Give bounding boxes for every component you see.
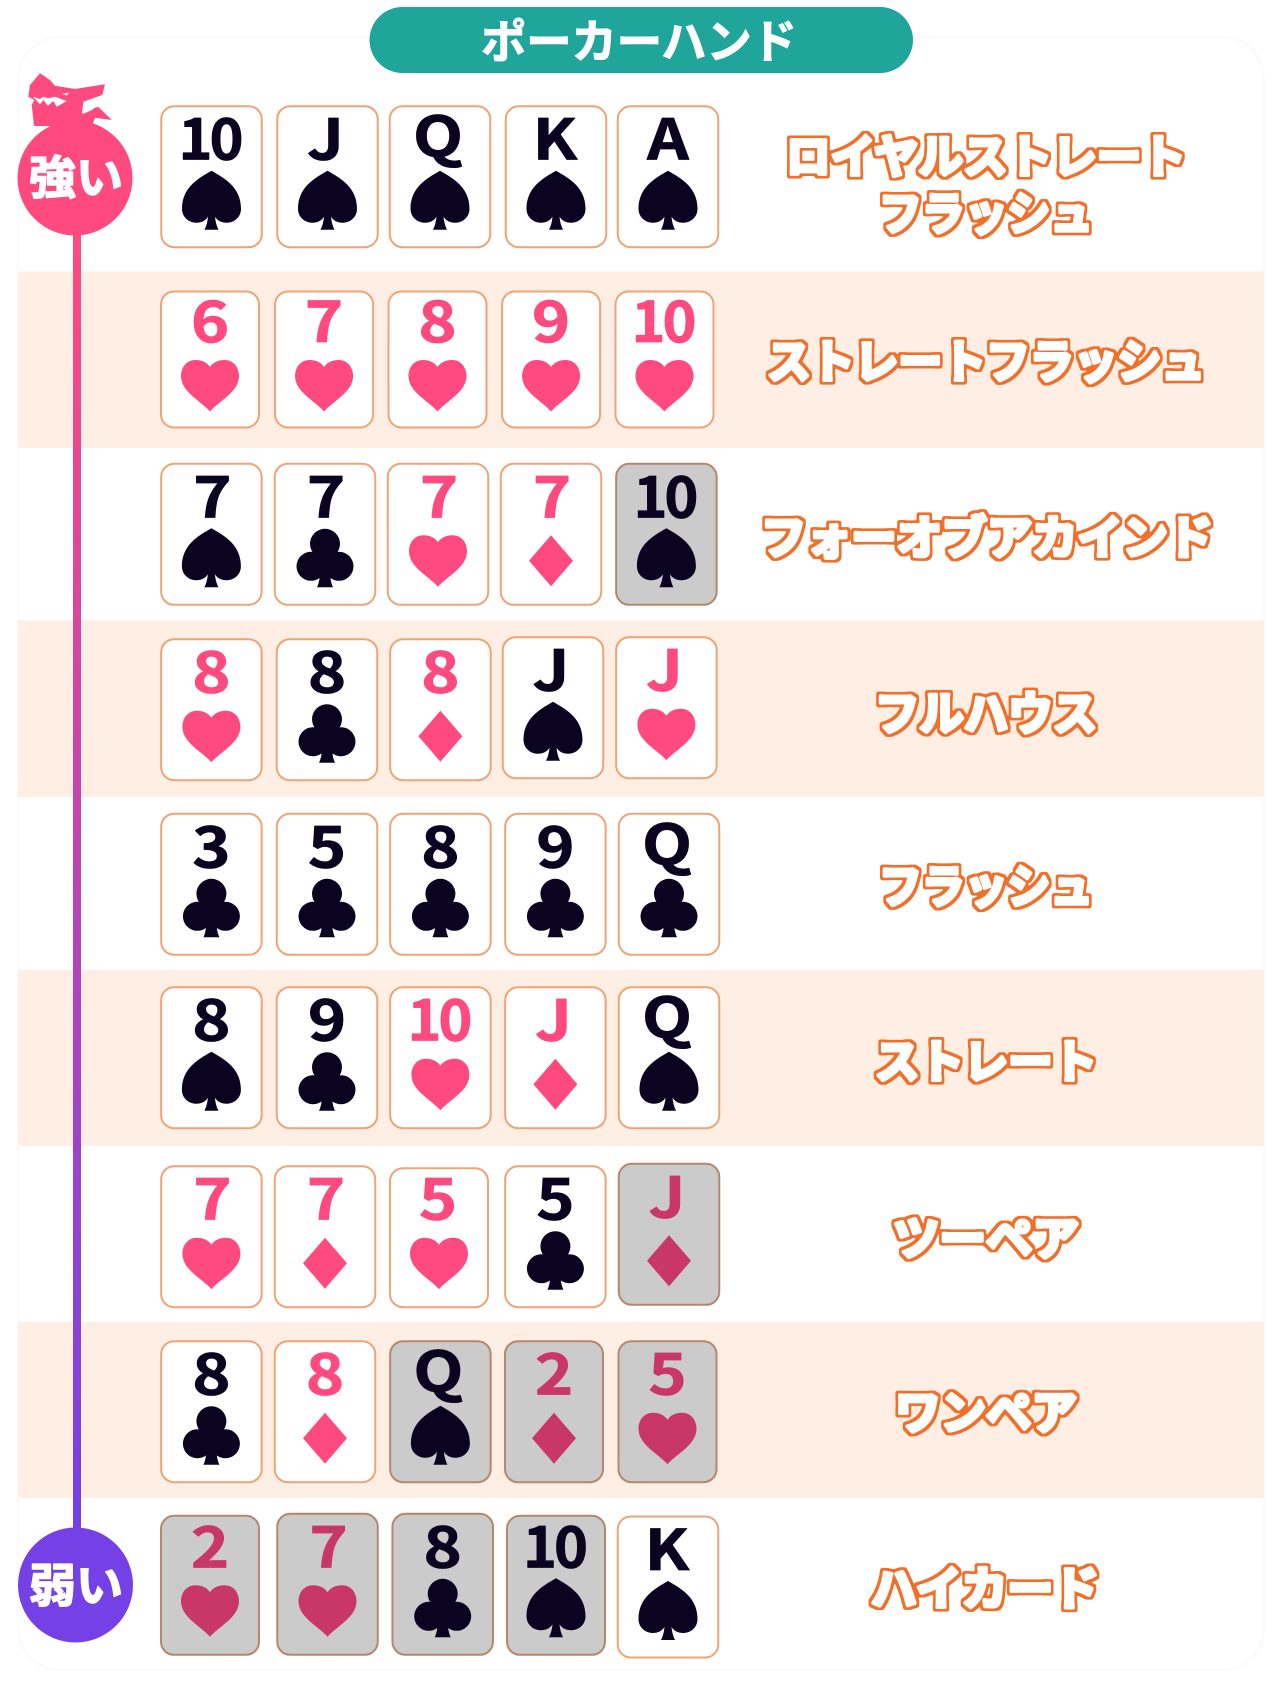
card: Q spades	[619, 974, 719, 1128]
card: 7 hearts: 7	[420, 454, 458, 534]
card: 9 clubs	[505, 804, 606, 955]
card: 7 spades	[161, 454, 262, 605]
card: 7 hearts greyed: 7	[309, 1504, 348, 1584]
card: A spades	[618, 96, 718, 247]
card: 5 clubs	[277, 804, 377, 955]
card: 5 hearts greyed	[618, 1331, 716, 1482]
card: J diamonds: J	[535, 977, 572, 1057]
card: 8 diamonds: 8	[421, 629, 460, 709]
card: 8 clubs	[161, 1331, 262, 1482]
row: one pair	[18, 1322, 1264, 1498]
title pill: ポーカーハンド	[481, 6, 797, 72]
card: 8 clubs greyed: 8	[424, 1504, 462, 1584]
card: 8 hearts	[161, 629, 262, 780]
card: 5 hearts: 5	[419, 1156, 457, 1236]
card: 7 diamonds	[275, 1156, 375, 1307]
card: 10 spades greyed	[507, 1503, 605, 1655]
card: 2 hearts greyed: 2	[191, 1504, 229, 1584]
label: four of a kind: フォーオブアカインド	[761, 502, 1213, 568]
label: one pair: ワンペア	[895, 1377, 1077, 1443]
card: 10 spades greyed: 10	[633, 453, 697, 534]
card: 7 diamonds: 7	[533, 454, 571, 534]
card: 2 diamonds greyed: 2	[535, 1331, 573, 1411]
row: straight	[18, 970, 1264, 1146]
card: 3 clubs	[161, 804, 262, 955]
card: 8 clubs: 8	[421, 804, 460, 884]
card: 7 hearts	[275, 278, 373, 428]
card: 8 clubs greyed	[392, 1504, 493, 1655]
card: Q spades greyed: Q	[413, 1328, 463, 1408]
card: 5 hearts	[390, 1156, 488, 1307]
card: 7 diamonds: 7	[307, 1156, 345, 1236]
label: straight flush: ストレートフラッシュ	[767, 326, 1205, 392]
card: 7 diamonds	[501, 454, 601, 605]
card: J hearts	[616, 627, 717, 778]
card: J hearts: J	[646, 627, 683, 707]
card: 8 hearts: 8	[192, 629, 231, 709]
card: 9 hearts	[502, 278, 600, 428]
card: 7 clubs	[275, 454, 375, 605]
card: J spades: J	[533, 627, 569, 707]
card: 8 clubs: 8	[308, 629, 346, 709]
card: 5 hearts greyed: 5	[648, 1331, 687, 1411]
title pill	[370, 6, 913, 73]
card: 8 diamonds	[390, 629, 491, 780]
row: two pair	[161, 1154, 1079, 1307]
card: 10 hearts: 10	[632, 278, 695, 359]
card: 8 diamonds: 8	[306, 1331, 344, 1411]
label: flush: フラッシュ	[879, 851, 1093, 917]
card: A spades: A	[646, 96, 690, 176]
card: 6 hearts	[161, 278, 259, 428]
card: J diamonds greyed	[619, 1154, 719, 1305]
card: K spades	[618, 1506, 718, 1658]
row: full house	[18, 620, 1264, 797]
card: 10 hearts	[616, 278, 714, 428]
strong badge	[18, 120, 132, 236]
label: royal straight flush: ロイヤルストレート	[786, 121, 1186, 187]
card: 5 clubs: 5	[308, 804, 346, 884]
card: Q spades: Q	[642, 974, 692, 1054]
label: royal straight flush: フラッシュ	[879, 178, 1093, 244]
card: J diamonds	[505, 977, 606, 1128]
card: 9 clubs	[277, 977, 377, 1128]
card: Q spades greyed	[390, 1328, 491, 1482]
card: 9 hearts: 9	[532, 278, 570, 359]
row: royal straight flush	[161, 93, 1186, 247]
card: Q spades: Q	[413, 93, 463, 173]
card: Q clubs: Q	[642, 801, 692, 881]
card: 8 clubs: 8	[192, 1331, 231, 1411]
label: full house: フルハウス	[875, 678, 1097, 744]
label: two pair: ツーペア	[893, 1203, 1079, 1269]
row: flush	[161, 801, 1093, 955]
weak badge	[18, 1528, 133, 1642]
card: 7 hearts: 7	[193, 1156, 232, 1236]
card: 8 hearts: 8	[418, 278, 457, 359]
strong badge: 強い	[29, 142, 123, 208]
card: 7 hearts	[161, 1156, 262, 1307]
icon: dragon	[28, 73, 112, 126]
card: 10 spades greyed: 10	[523, 1503, 586, 1584]
card: K spades: K	[533, 96, 578, 176]
card: 8 clubs	[277, 629, 377, 780]
card: J diamonds greyed: J	[649, 1154, 685, 1234]
card: 9 clubs: 9	[536, 804, 575, 884]
card: 6 hearts: 6	[191, 278, 229, 359]
card: 7 clubs: 7	[307, 454, 345, 534]
card: 9 clubs: 9	[308, 977, 346, 1057]
row: straight flush	[18, 272, 1264, 448]
card: 5 clubs: 5	[536, 1156, 575, 1236]
card: 10 spades	[161, 96, 262, 247]
card: 7 hearts greyed	[277, 1504, 378, 1655]
card: 8 diamonds	[275, 1331, 375, 1482]
card: 10 spades: 10	[179, 96, 242, 176]
weak badge: 弱い	[29, 1550, 123, 1616]
card: 8 hearts	[388, 278, 486, 428]
card: 2 hearts greyed	[161, 1504, 259, 1655]
card: 3 clubs: 3	[192, 804, 231, 884]
card: 7 hearts: 7	[305, 278, 343, 359]
card: 8 spades: 8	[192, 977, 231, 1057]
card: 7 hearts	[388, 454, 488, 605]
label: royal straight flush	[786, 121, 1186, 244]
row: four of a kind	[161, 453, 1213, 605]
card: 10 hearts	[390, 977, 491, 1128]
strength scale line	[73, 225, 81, 1535]
card: Q clubs	[619, 801, 719, 955]
card: 5 clubs	[505, 1156, 606, 1307]
card: Q spades	[390, 93, 490, 247]
card: 8 clubs	[390, 804, 491, 955]
label: straight: ストレート	[875, 1026, 1097, 1092]
card: 8 spades	[161, 977, 262, 1128]
label: high card: ハイカード	[871, 1553, 1099, 1619]
card: K spades	[506, 96, 606, 247]
row: high card	[161, 1503, 1099, 1658]
card: 7 spades: 7	[193, 454, 232, 534]
card: 10 spades greyed	[616, 453, 717, 605]
card: J spades	[277, 96, 378, 247]
card: J spades	[503, 627, 603, 778]
card: 10 hearts: 10	[407, 977, 471, 1057]
card: J spades: J	[307, 96, 344, 176]
card: 2 diamonds greyed	[505, 1331, 603, 1482]
card: K spades: K	[645, 1506, 690, 1587]
